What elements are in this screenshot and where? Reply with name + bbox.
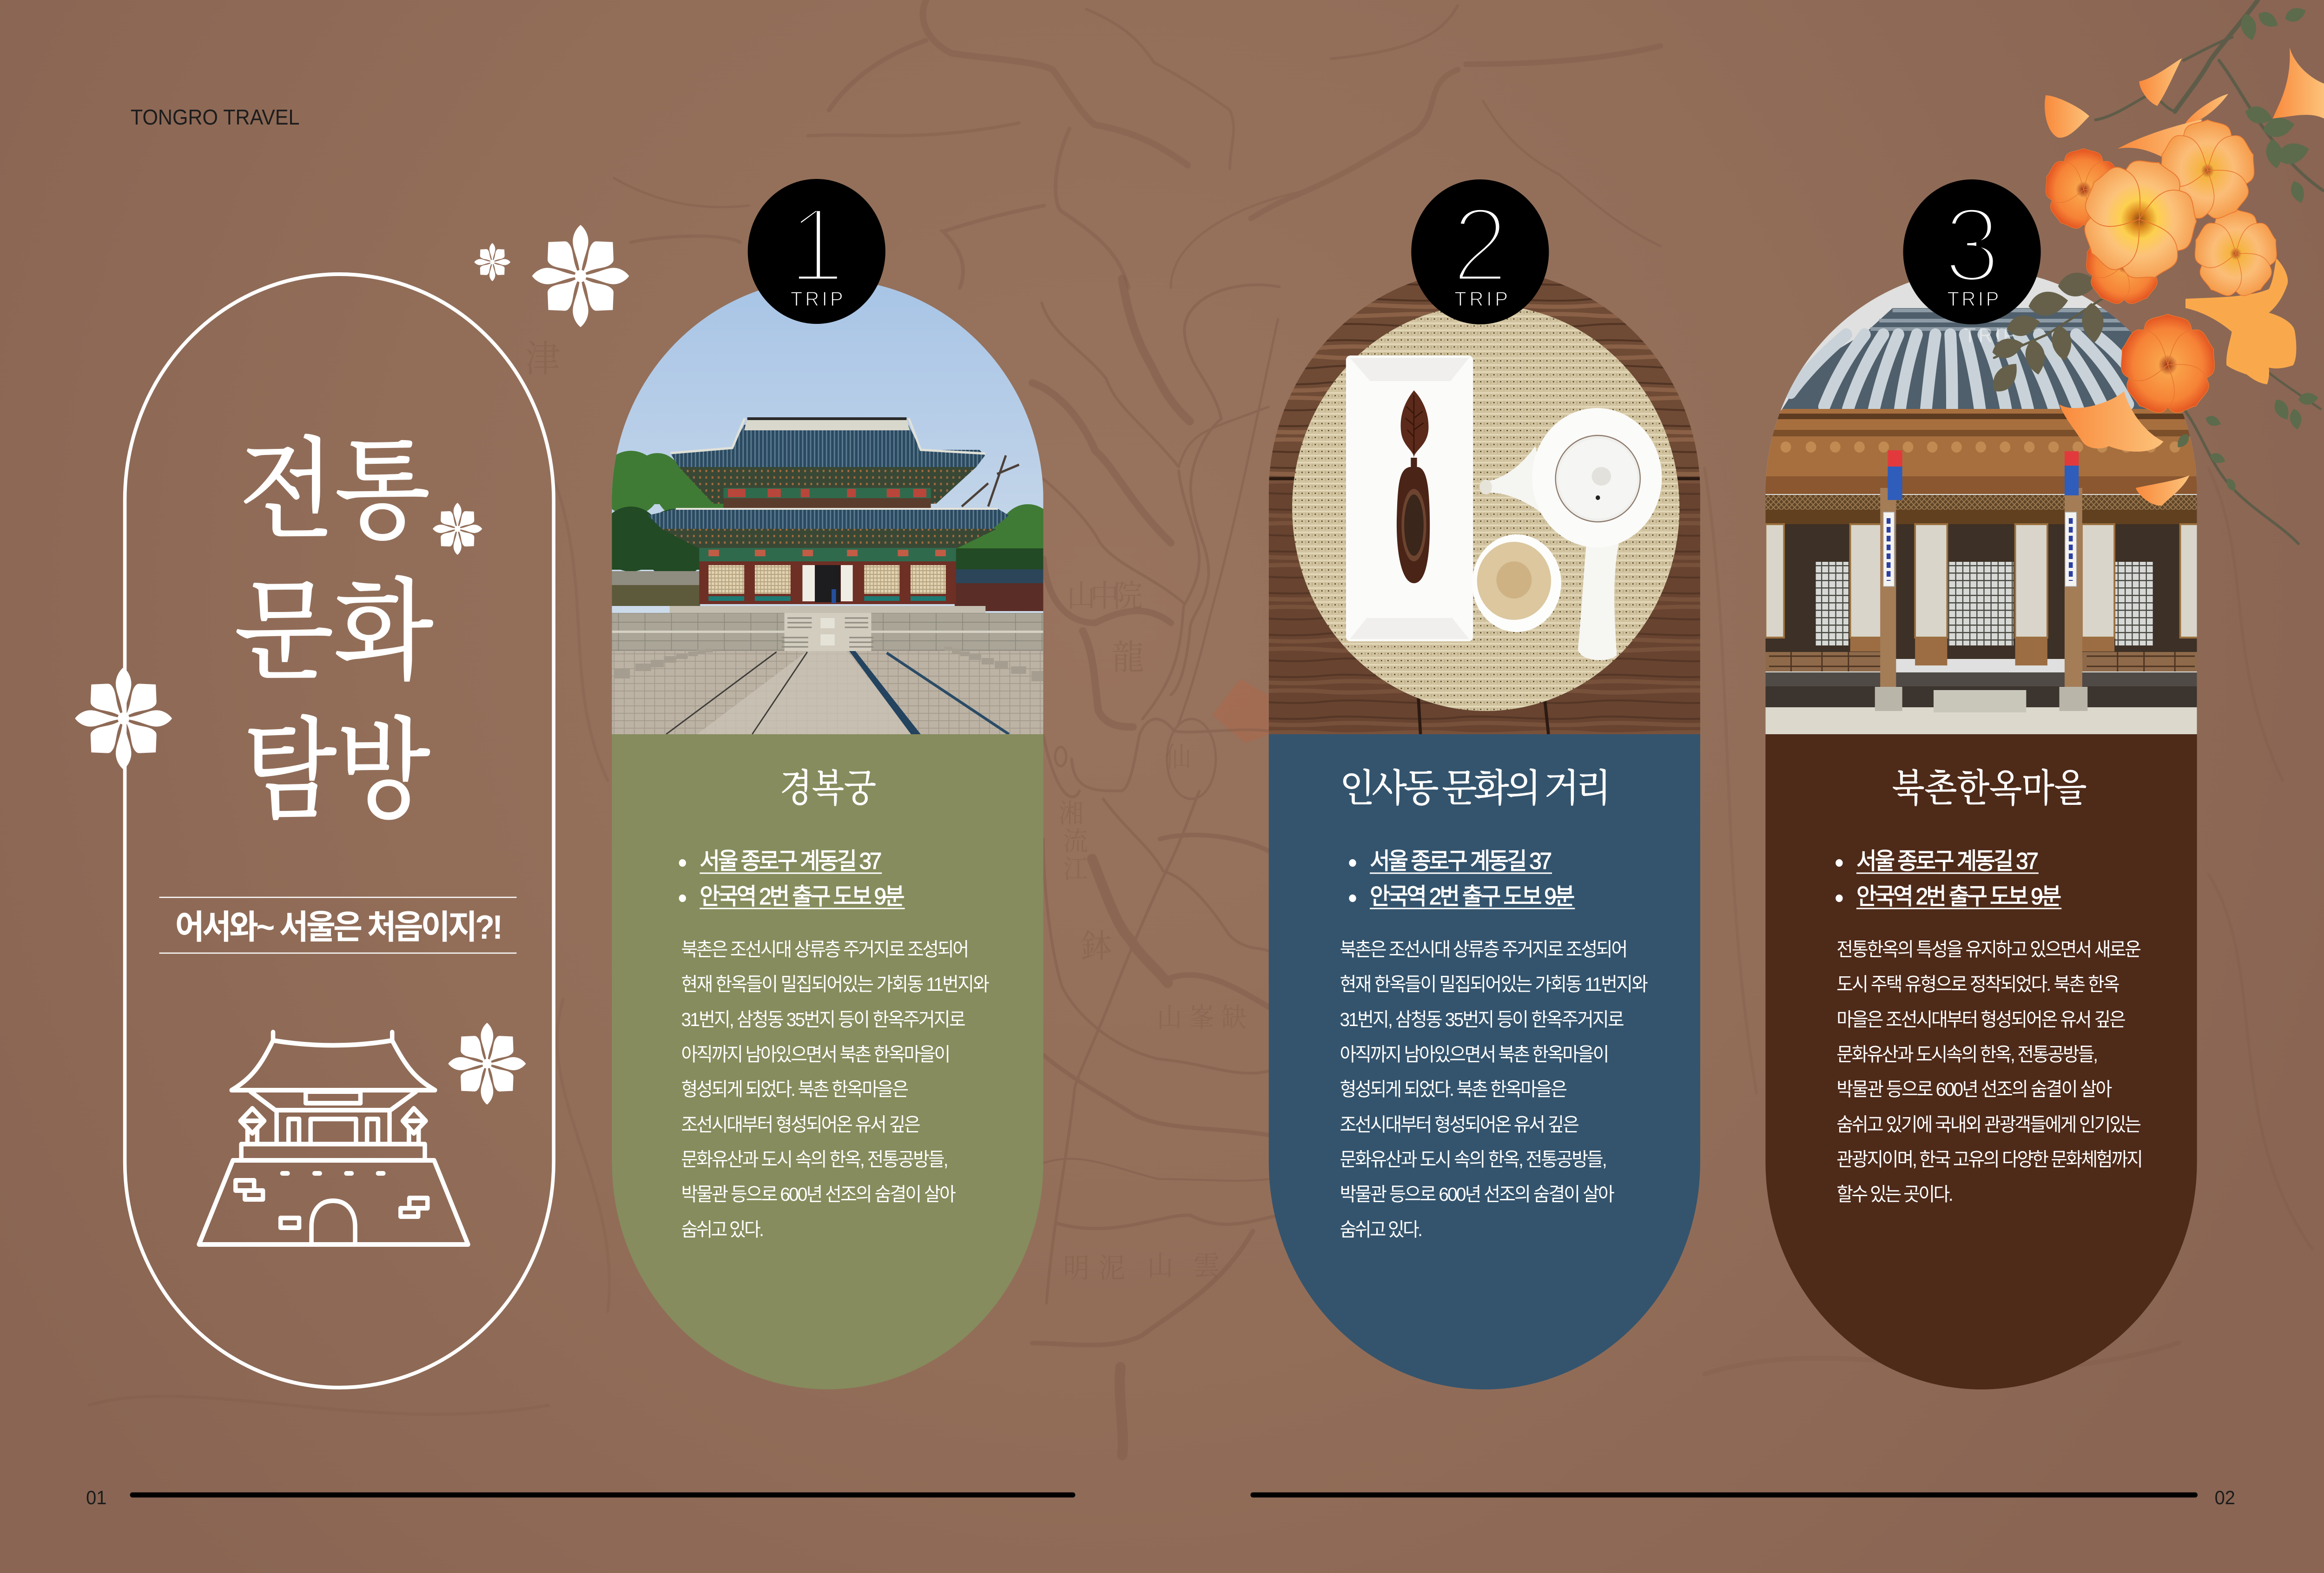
- text panel: olive: [612, 734, 1043, 1389]
- badge: trip 3: TRIP: [1947, 288, 1999, 310]
- title: 전통: [239, 430, 430, 552]
- title: 문화: [234, 572, 433, 693]
- body text: 박물관 등으로 600년 선조의 숨결이 살아: [1836, 1079, 2112, 1100]
- brand label: TONGRO TRAVEL: [131, 105, 299, 129]
- background: old map: 山中院: [1067, 579, 1142, 613]
- body text: 북촌은 조선시대 상류층 주거지로 조성되어: [681, 939, 969, 960]
- background: old map: 龍: [1112, 638, 1144, 677]
- badge: trip 1: 1: [788, 185, 845, 304]
- background: old map: 明 泥: [1063, 1253, 1125, 1284]
- body text: 아직까지 남아있으면서 북촌 한옥마을이: [1340, 1044, 1609, 1065]
- background: old map: 江: [1063, 855, 1088, 884]
- body text: 조선시대부터 형성되어온 유서 깊은: [1340, 1114, 1579, 1135]
- badge: trip 2: [1411, 179, 1549, 324]
- background: old map: 湘: [1059, 799, 1083, 828]
- body text: 마을은 조선시대부터 형성되어온 유서 깊은: [1836, 1009, 2126, 1030]
- body text: 현재 한옥들이 밀집되어있는 가회동 11번지와: [1340, 974, 1648, 995]
- body text: 숨쉬고 있기에 국내외 관광객들에게 인기있는: [1836, 1114, 2141, 1135]
- panel: trip 1: [600, 179, 1056, 1389]
- photo: tea set: [1269, 265, 1700, 734]
- body text: 31번지, 삼청동 35번지 등이 한옥주거지로: [1340, 1009, 1624, 1030]
- address list: 안국역 2번 출구 도보 9분: [700, 884, 905, 909]
- body text: 북촌은 조선시대 상류층 주거지로 조성되어: [1340, 939, 1628, 960]
- photo: palace hall: [600, 274, 1056, 735]
- body text: [1340, 939, 1648, 1240]
- badge: trip 3: [1903, 179, 2041, 347]
- title: [234, 430, 433, 832]
- background: old map: 仙: [1165, 742, 1191, 773]
- illustration: orange trumpet vine: [1987, 0, 2324, 544]
- badge: trip 2: TRIP: [1454, 288, 1508, 310]
- address list: 안국역 2번 출구 도보 9분: [1370, 884, 1575, 909]
- background: old map: 鉢: [1081, 928, 1112, 964]
- body text: 관광지이며, 한국 고유의 다양한 문화체험까지: [1836, 1149, 2143, 1170]
- body text: 현재 한옥들이 밀집되어있는 가회동 11번지와: [681, 974, 990, 995]
- body text: 조선시대부터 형성되어온 유서 깊은: [681, 1114, 921, 1135]
- icon: decorative flowers: [75, 225, 629, 1105]
- footer: left page number: 01: [86, 1487, 106, 1508]
- address list: 서울 종로구 계동길 37: [1856, 849, 2039, 874]
- badge: trip 2: 2: [1452, 185, 1508, 304]
- body text: 할수 있는 곳이다.: [1836, 1184, 1954, 1205]
- address list: 서울 종로구 계동길 37: [700, 849, 882, 874]
- body text: 형성되게 되었다. 북촌 한옥마을은: [1340, 1079, 1567, 1100]
- background: old map: 津: [525, 339, 560, 380]
- heading: 인사동 문화의 거리: [1340, 768, 1611, 810]
- body text: [681, 939, 990, 1240]
- subtitle with rules: 어서와~ 서울은 처음이지?!: [175, 908, 503, 946]
- icon: traditional gate: [199, 1032, 468, 1244]
- body text: 전통한옥의 특성을 유지하고 있으면서 새로운: [1836, 939, 2141, 960]
- subtitle with rules: [159, 897, 516, 953]
- heading: 북촌한옥마을: [1892, 768, 2086, 810]
- badge: trip 3: TRIP: [1964, 324, 2016, 347]
- address list: 서울 종로구 계동길 37: [1370, 849, 1552, 874]
- panel: intro outline pill: [75, 225, 629, 1388]
- badge: trip 1: TRIP: [791, 288, 843, 310]
- heading: 경복궁: [780, 768, 876, 810]
- address list: [679, 849, 905, 909]
- body text: 숨쉬고 있다.: [1340, 1219, 1423, 1240]
- body text: 형성되게 되었다. 북촌 한옥마을은: [681, 1079, 909, 1100]
- body text: 박물관 등으로 600년 선조의 숨결이 살아: [1340, 1184, 1615, 1205]
- background: old map: 山 雲: [1147, 1251, 1220, 1282]
- text panel: brown: [1765, 734, 2197, 1389]
- title: 탐방: [243, 711, 430, 832]
- photo: hanok house: [1765, 265, 2198, 735]
- body text: 숨쉬고 있다.: [681, 1219, 764, 1240]
- panel: trip 2: [1269, 179, 1700, 1389]
- body text: 문화유산과 도시속의 한옥, 전통공방들,: [1836, 1044, 2098, 1065]
- body text: 박물관 등으로 600년 선조의 숨결이 살아: [681, 1184, 956, 1205]
- body text: 문화유산과 도시 속의 한옥, 전통공방들,: [1340, 1149, 1607, 1170]
- badge: trip 1: [748, 179, 885, 324]
- address list: [1349, 849, 1575, 909]
- text panel: navy: [1269, 734, 1700, 1389]
- body text: 아직까지 남아있으면서 북촌 한옥마을이: [681, 1044, 951, 1065]
- body text: 도시 주택 유형으로 정착되었다. 북촌 한옥: [1836, 974, 2120, 995]
- body text: [1836, 939, 2143, 1205]
- badge: trip 3: 3: [1944, 185, 2000, 304]
- body text: 문화유산과 도시 속의 한옥, 전통공방들,: [681, 1149, 949, 1170]
- address list: 안국역 2번 출구 도보 9분: [1856, 884, 2061, 909]
- flowers: [2040, 120, 2296, 421]
- body text: 31번지, 삼청동 35번지 등이 한옥주거지로: [681, 1009, 966, 1030]
- address list: [1836, 849, 2061, 909]
- buds: [2045, 47, 2324, 506]
- leaves: brown sprig: [1987, 271, 2105, 398]
- footer: right page number: 02: [2215, 1487, 2235, 1508]
- background: old map: 山 峯 缺: [1157, 1004, 1247, 1033]
- panel: trip 3: [1765, 179, 2198, 1389]
- background: old map: 流: [1063, 827, 1088, 856]
